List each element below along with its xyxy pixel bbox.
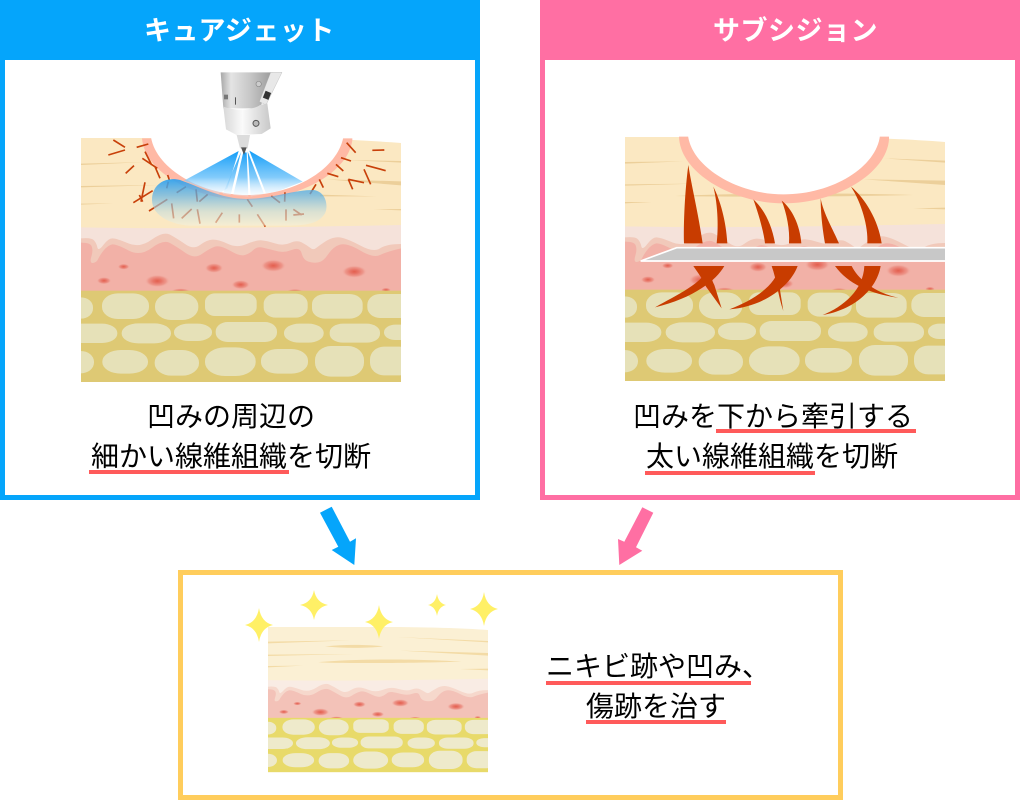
lower thick fibres [655, 266, 898, 315]
caption line 2: 細かい線維組織を切断 [91, 441, 371, 472]
underline 1 [716, 429, 916, 433]
jet spray [184, 151, 303, 197]
acne scar crater [679, 137, 889, 203]
illustration: skin cross-section with jet spray [57, 72, 417, 382]
skin fibre streaks [81, 160, 401, 210]
caption [633, 401, 916, 475]
caption line 1: 凹みを下から牽引する [633, 401, 913, 432]
result frame [180, 572, 840, 798]
panel: キュアジェット [0, 0, 480, 498]
panel frame [542, 2, 1018, 498]
upper thick fibres [684, 165, 882, 243]
skin fibre streaks [625, 158, 945, 209]
panel: サブシジョン [540, 0, 1020, 498]
arrow: blue [320, 507, 356, 565]
sparkles [245, 590, 498, 642]
blue treated area [152, 179, 326, 226]
underline 2 [586, 720, 726, 724]
skin fibre streaks [268, 637, 488, 670]
panel header bar [540, 0, 1020, 60]
skin layers [57, 138, 417, 382]
acne scar crater [142, 137, 352, 200]
underline 1 [546, 681, 751, 685]
caption line 2: 太い線維組織を切断 [646, 441, 898, 472]
panel: result [180, 572, 840, 798]
skin layers [601, 137, 961, 381]
skin layers [251, 627, 499, 772]
arrow: pink [618, 507, 653, 565]
result text [546, 651, 770, 724]
heading: キュアジェット: キュアジェット [144, 16, 335, 46]
panel frame [2, 2, 478, 498]
result line 1: ニキビ跡や凹み、 [546, 651, 770, 682]
result line 2: 傷跡を治す [586, 691, 726, 722]
underline 2 [645, 471, 815, 475]
jet nozzle device [221, 72, 282, 155]
underline [89, 470, 289, 474]
illustration: skin cross-section with blade [625, 136, 945, 381]
blade [641, 248, 953, 261]
illustration: healed skin [245, 590, 499, 772]
caption line 1: 凹みの周辺の [147, 401, 315, 432]
panel header bar [0, 0, 480, 60]
heading: サブシジョン: サブシジョン [713, 15, 878, 46]
fine fibres [108, 140, 386, 227]
caption [89, 401, 371, 474]
